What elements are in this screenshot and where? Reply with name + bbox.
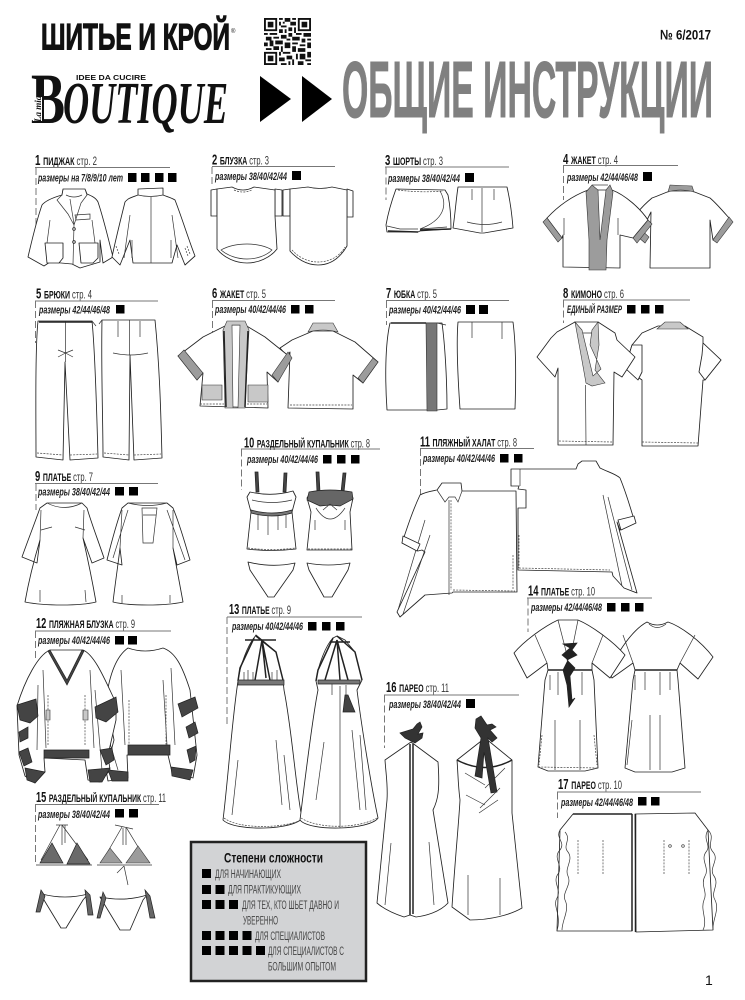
heading: 14 ПЛАТЬЕ стр. 10 (528, 582, 595, 600)
panel: item 16 pareo (377, 679, 522, 920)
garment: dress front (22, 503, 104, 605)
garment: dress front (514, 620, 625, 771)
difficulty square (466, 699, 475, 708)
difficulty square (643, 172, 652, 181)
heading: 1 ПИДЖАК стр. 2 (35, 152, 97, 169)
legend row 1 (202, 869, 281, 881)
heading: 9 ПЛАТЬЕ стр. 7 (35, 468, 93, 485)
sizes: размеры 42/44/46/48 (560, 797, 634, 809)
garment: pareo front (556, 814, 632, 931)
heading: 11 ПЛЯЖНЫЙ ХАЛАТ стр. 8 (420, 434, 517, 450)
panel: item 7 skirt (386, 285, 516, 411)
difficulty squares (115, 487, 138, 496)
garment: dress back (608, 622, 713, 772)
difficulty squares (627, 305, 664, 314)
garment: trousers back (99, 320, 162, 460)
sizes: размеры 38/40/42/44 (214, 171, 287, 183)
garment: blouse back (283, 187, 353, 265)
sizes: размеры 40/42/44/46 (388, 304, 462, 316)
legend row 5: БОЛЬШИМ ОПЫТОМ (268, 962, 336, 974)
difficulty square (292, 171, 301, 180)
difficulty squares (115, 809, 138, 818)
sizes: размеры 40/42/44/46 (246, 454, 319, 466)
difficulty square (465, 173, 474, 182)
garment: bikini bottom front (248, 562, 295, 597)
panel: item 6 jacket (178, 285, 378, 409)
legend row 5: ДЛЯ СПЕЦИАЛИСТОВ С (268, 946, 344, 958)
sizes: размеры 42/44/46/48 (530, 602, 603, 614)
garment: kimono back (625, 322, 721, 446)
difficulty squares (323, 455, 360, 464)
garment: bikini top back (97, 825, 152, 885)
panel: item 3 shorts (385, 152, 513, 233)
sizes: размеры 38/40/42/44 (387, 173, 460, 185)
heading: 6 ЖАКЕТ стр. 5 (212, 285, 266, 302)
legend row 4: ДЛЯ СПЕЦИАЛИСТОВ (255, 931, 325, 943)
issue number: № 6/2017 (660, 26, 711, 42)
heading: 2 БЛУЗКА стр. 3 (212, 152, 269, 168)
garment: skirt front (386, 323, 447, 411)
logo: La mia Boutique (31, 59, 228, 139)
legend row 1: ДЛЯ НАЧИНАЮЩИХ (215, 869, 281, 881)
masthead: magazine title: ® (231, 28, 236, 35)
panel: item 9 dress (22, 468, 190, 605)
panel: item 11 robe (397, 434, 637, 617)
heading: 3 ШОРТЫ стр. 3 (385, 152, 443, 169)
garment: pareo back (635, 813, 717, 932)
difficulty squares (291, 305, 314, 314)
garment: dress front (223, 635, 302, 828)
legend row 3: УВЕРЕННО (243, 916, 278, 928)
garment: robe front (397, 483, 517, 617)
garment: tankini back (307, 472, 353, 550)
garment: shorts back (453, 187, 513, 233)
garment: blouse front (211, 187, 282, 263)
logo: La mia Boutique: OUTIQUE (63, 70, 228, 136)
panel: item 10 swimsuit (241, 434, 380, 597)
difficulty squares (466, 305, 488, 314)
sizes: размеры 42/44/46/48 (38, 304, 111, 316)
QR code (264, 18, 311, 65)
heading: 7 ЮБКА стр. 5 (386, 285, 437, 302)
garment: jacket back (112, 188, 195, 265)
heading: 13 ПЛАТЬЕ стр. 9 (229, 601, 291, 618)
garment: pareo back (452, 716, 522, 920)
logo: La mia Boutique: La mia (33, 95, 43, 123)
legend row 2 (202, 884, 301, 896)
difficulty squares (500, 454, 522, 462)
logo: La mia Boutique: B (31, 59, 65, 139)
garment: blouse front (17, 650, 118, 783)
panel: item 1 jacket (28, 152, 195, 268)
heading: 12 ПЛЯЖНАЯ БЛУЗКА стр. 9 (36, 615, 135, 632)
legend row 4 (202, 931, 325, 943)
panel: item 4 jacket (543, 151, 733, 270)
garment: jacket back (280, 323, 378, 409)
heading: 16 ПАРЕО стр. 11 (386, 679, 449, 696)
sizes: размеры 38/40/42/44 (37, 486, 110, 498)
heading: 17 ПАРЕО стр. 10 (558, 776, 622, 793)
sizes: размеры 38/40/42/44 (37, 809, 110, 821)
garment: kimono front (537, 322, 635, 445)
garment: bikini top front (36, 825, 92, 865)
garment: trousers front (36, 321, 98, 460)
panel: difficulty legend (191, 842, 366, 981)
panel: item 17 pareo (556, 776, 717, 932)
panel: item 13 dress (223, 601, 378, 828)
difficulty squares (308, 622, 344, 630)
panel: item 8 kimono (537, 285, 721, 446)
difficulty square (116, 305, 124, 314)
sizes: размеры 40/42/44/46 (231, 621, 304, 633)
garment: bikini bottom back (307, 563, 350, 597)
panel: item 15 swimsuit (35, 789, 166, 930)
logo: La mia Boutique: IDEE DA CUCIRE (76, 75, 146, 82)
garment: bikini bottom back (97, 890, 155, 930)
sizes: ЕДИНЫЙ РАЗМЕР (567, 303, 622, 316)
heading: 10 РАЗДЕЛЬНЫЙ КУПАЛЬНИК стр. 8 (244, 434, 370, 452)
panel: item 5 trousers (35, 286, 162, 460)
sizes: размеры 40/42/44/46 (214, 304, 287, 316)
sizes: размеры 42/44/46/48 (566, 172, 639, 184)
arrows: double triangles (260, 76, 332, 122)
masthead: magazine title (41, 16, 236, 58)
panel: item 12 beach blouse (17, 615, 198, 783)
garment: blouse back (103, 648, 198, 781)
garment: robe back (511, 461, 637, 593)
heading: 8 КИМОНО стр. 6 (563, 285, 624, 302)
garment: pareo front (377, 722, 448, 917)
difficulty squares (115, 636, 137, 644)
legend row 5 (202, 946, 344, 974)
difficulty squares (638, 797, 660, 806)
panel: item 2 blouse (211, 152, 353, 265)
sizes: размеры 40/42/44/46 (37, 635, 111, 647)
difficulty squares (128, 173, 176, 182)
page number: 1 (705, 972, 713, 988)
garment: skirt back (457, 322, 516, 409)
garment: shorts front (386, 189, 451, 232)
difficulty squares (607, 603, 644, 612)
sizes: размеры 40/42/44/46 (422, 453, 496, 465)
garment: jacket front (28, 189, 113, 268)
masthead: magazine title: ШИТЬЕ И КРОЙ (41, 16, 230, 58)
legend row 3 (202, 900, 339, 928)
garment: tankini front (247, 472, 296, 550)
sizes: размеры 38/40/42/44 (388, 699, 461, 711)
heading: 4 ЖАКЕТ стр. 4 (563, 151, 618, 168)
garment: bikini bottom front (36, 890, 93, 928)
garment: dress back (107, 503, 190, 605)
garment: jacket front (543, 185, 652, 270)
sizes: размеры на 7/8/9/10 лет (37, 172, 123, 184)
heading: 5 БРЮКИ стр. 4 (36, 286, 92, 302)
panel: item 14 dress (514, 582, 713, 772)
heading: 15 РАЗДЕЛЬНЫЙ КУПАЛЬНИК стр. 11 (36, 789, 166, 806)
garment: dress back (300, 636, 378, 828)
legend row 3: ДЛЯ ТЕХ, КТО ШЬЕТ ДАВНО И (242, 900, 339, 912)
legend title: Степени сложности (224, 850, 323, 866)
garment: jacket front (178, 321, 292, 408)
legend row 2: ДЛЯ ПРАКТИКУЮЩИХ (228, 884, 301, 896)
garment: jacket back (632, 185, 733, 268)
